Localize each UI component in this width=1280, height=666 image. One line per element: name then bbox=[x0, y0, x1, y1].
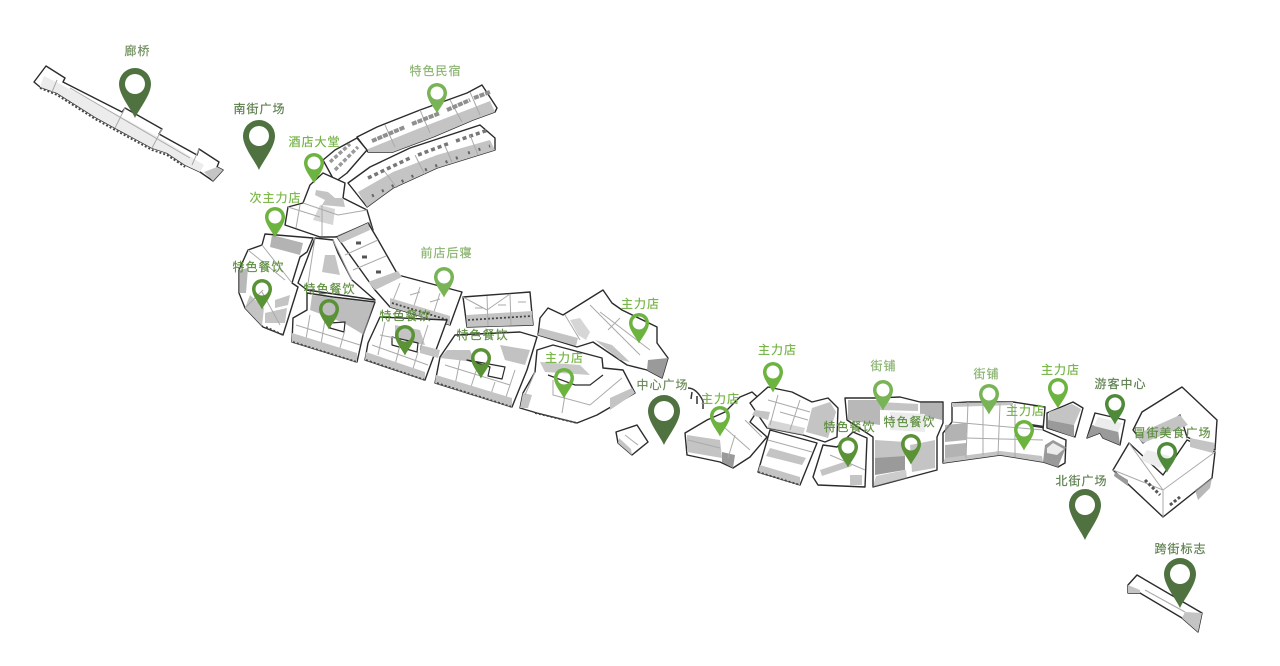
building: north guesthouse rows bbox=[348, 85, 497, 207]
pin: 主力店 east 3: 主力店 bbox=[1041, 363, 1080, 377]
pin: 街铺 1: 街铺 bbox=[870, 359, 897, 373]
building: west restaurant bbox=[239, 234, 313, 335]
building: food plaza bbox=[1113, 387, 1217, 517]
pin: 中心广场: 中心广场 bbox=[636, 377, 689, 392]
pin: 特色民宿 bbox=[409, 63, 462, 114]
pin: 街铺 2: 街铺 bbox=[973, 367, 1000, 381]
pin: 北街广场 bbox=[1055, 474, 1108, 540]
pin: 酒店大堂: 酒店大堂 bbox=[288, 135, 341, 149]
pin: 街铺 2 bbox=[973, 367, 1000, 414]
building: restaurant block east bbox=[813, 432, 867, 487]
building: anchor store block east 1 bbox=[685, 392, 767, 468]
pin: 北街广场: 北街广场 bbox=[1055, 474, 1108, 488]
pin: 特色餐饮 block 4 bbox=[456, 327, 509, 378]
pin: 廊桥 bbox=[119, 43, 151, 118]
pin: 南街广场 bbox=[233, 101, 286, 170]
building: anchor store block east 2 bbox=[750, 387, 838, 442]
pin: 游客中心 bbox=[1094, 376, 1147, 424]
pin: 主力店 east 4 bbox=[1006, 404, 1045, 450]
pin: 特色民宿: 特色民宿 bbox=[409, 63, 462, 78]
building: triangular block bbox=[298, 238, 375, 300]
pin: 主力店 south: 主力店 bbox=[545, 351, 584, 365]
pin: 主力店 north bbox=[621, 297, 660, 344]
building: covered bridge bbox=[34, 66, 223, 181]
pin: 主力店 east 3 bbox=[1041, 363, 1080, 408]
pin: 特色餐饮 east 1 bbox=[823, 419, 876, 468]
building: restaurant block 2 bbox=[292, 293, 375, 362]
building: stage canopy bbox=[688, 388, 703, 409]
building: hotel lobby bbox=[285, 173, 373, 237]
pin: 美食广场: 冒街美食广场 bbox=[1133, 425, 1212, 440]
pin: 特色餐饮 block 4: 特色餐饮 bbox=[456, 327, 509, 342]
pin: 跨街标志 bbox=[1154, 542, 1207, 608]
building: restaurant block 4 bbox=[435, 332, 537, 407]
pin: 次主力店 bbox=[249, 191, 302, 238]
pin: 游客中心: 游客中心 bbox=[1094, 376, 1147, 391]
building: cross-street landmark bbox=[1128, 575, 1202, 632]
pin: 南街广场: 南街广场 bbox=[233, 101, 286, 116]
pin: 主力店 east 4: 主力店 bbox=[1006, 404, 1045, 418]
pin: 廊桥: 廊桥 bbox=[124, 43, 151, 58]
pin: 特色餐饮 east 2 bbox=[883, 414, 936, 464]
building: anchor store block east 3 bbox=[758, 430, 817, 485]
building: townhouse row bbox=[463, 292, 533, 327]
pin: 特色餐饮 east 1: 特色餐饮 bbox=[823, 419, 876, 434]
pin: 主力店 east 1 bbox=[701, 392, 740, 436]
pin: 特色餐饮 block 3: 特色餐饮 bbox=[379, 308, 432, 323]
pin: 特色餐饮 block 2 bbox=[303, 281, 356, 330]
building: small grey anchor store bbox=[1047, 402, 1083, 437]
pin: 特色餐饮 west: 特色餐饮 bbox=[232, 259, 285, 274]
building: anchor store block north bbox=[538, 290, 668, 378]
building: small pavilion bbox=[616, 425, 648, 455]
pin: 特色餐饮 block 3 bbox=[379, 308, 432, 356]
building: visitor center bbox=[1087, 413, 1125, 445]
pin: 街铺 1 bbox=[870, 359, 897, 410]
pin: 主力店 south bbox=[545, 351, 584, 398]
building: restaurant block 3 bbox=[365, 317, 447, 380]
building: shop and restaurant block bbox=[845, 397, 943, 487]
pin: 酒店大堂 bbox=[288, 135, 341, 184]
pin: 特色餐饮 block 2: 特色餐饮 bbox=[303, 281, 356, 296]
pin: 美食广场 bbox=[1133, 425, 1212, 472]
pin: 特色餐饮 west bbox=[232, 259, 285, 310]
pin: 主力店 east 2 bbox=[758, 343, 797, 392]
building: long shop row bbox=[943, 402, 1066, 467]
building: anchor store block south bbox=[520, 345, 635, 423]
building: diagonal row behind shop bbox=[337, 223, 462, 325]
pin: 特色餐饮 east 2: 特色餐饮 bbox=[883, 414, 936, 429]
pin: 中心广场 bbox=[636, 377, 689, 445]
pin: 前店后寝 bbox=[420, 245, 473, 298]
building: hotel curved wing bbox=[323, 138, 367, 182]
pin: 主力店 north: 主力店 bbox=[621, 297, 660, 311]
pin: 次主力店: 次主力店 bbox=[249, 191, 302, 205]
pin: 前店后寝: 前店后寝 bbox=[420, 245, 473, 260]
pin: 主力店 east 1: 主力店 bbox=[701, 392, 740, 406]
pin: 跨街标志: 跨街标志 bbox=[1154, 542, 1207, 556]
pin: 主力店 east 2: 主力店 bbox=[758, 343, 797, 357]
